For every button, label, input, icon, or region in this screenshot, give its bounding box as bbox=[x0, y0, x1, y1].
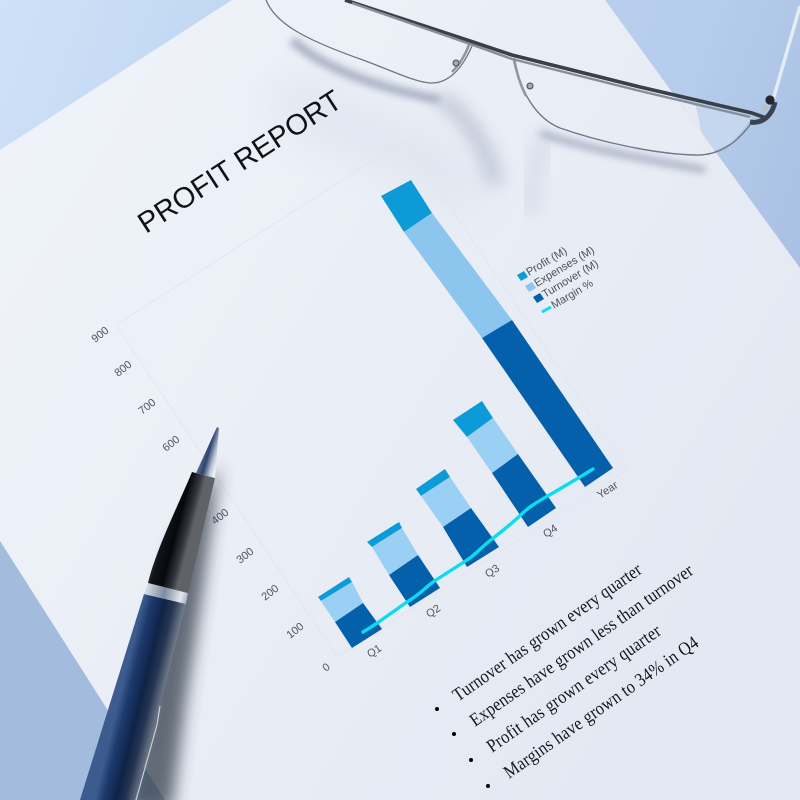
y-axis labels: 700 bbox=[136, 397, 158, 417]
legend: expenses: Expenses (M) bbox=[532, 244, 597, 290]
y-axis labels: 200 bbox=[259, 583, 281, 603]
x-axis labels: Q3 bbox=[483, 562, 502, 581]
bullet list bbox=[435, 558, 702, 788]
legend: turnover: Turnover (M) bbox=[540, 258, 601, 301]
bar: Q4 bbox=[453, 401, 556, 527]
right lens rim bbox=[513, 58, 752, 155]
y-axis labels: 900 bbox=[89, 325, 111, 345]
temple arm bbox=[773, 6, 800, 100]
y-axis labels: 100 bbox=[284, 621, 306, 641]
bar: Q2 bbox=[367, 522, 440, 607]
legend bbox=[517, 244, 601, 312]
y-axis labels: 600 bbox=[160, 434, 182, 454]
y-axis labels bbox=[89, 325, 333, 674]
pen bbox=[80, 427, 219, 800]
y-axis labels: 300 bbox=[234, 546, 256, 566]
bar: Q3 bbox=[416, 469, 499, 567]
x-axis labels: Q4 bbox=[541, 522, 560, 541]
margin line bbox=[363, 469, 593, 632]
bullet 1: Turnover has grown every quarter bbox=[448, 558, 646, 705]
pen clip bbox=[136, 706, 160, 800]
bar: Q1 bbox=[318, 577, 382, 648]
title: PROFIT REPORT bbox=[132, 84, 348, 240]
pen grip bbox=[148, 472, 215, 593]
pen body bbox=[80, 594, 186, 800]
hinge bbox=[750, 95, 775, 122]
glasses bbox=[266, 0, 800, 155]
lens over background bbox=[696, 106, 752, 152]
x-axis labels: Q1 bbox=[365, 642, 384, 661]
pen shadow bbox=[125, 465, 220, 800]
left bridge arm bbox=[452, 42, 470, 72]
bullet 2: Expenses have grown less than turnover bbox=[465, 559, 697, 730]
frame highlight bbox=[352, 3, 750, 117]
legend: margin: Margin % bbox=[549, 277, 596, 312]
bar: Year bbox=[381, 180, 613, 487]
y-axis labels: 0 bbox=[320, 661, 333, 674]
stacked bar chart bbox=[318, 180, 613, 648]
legend: profit: Profit (M) bbox=[524, 245, 569, 279]
glasses shadow on paper bbox=[280, 40, 705, 215]
x-axis labels: Q2 bbox=[424, 602, 443, 621]
refracted paper edge in lens bbox=[678, 100, 717, 154]
pen cone bbox=[196, 427, 219, 478]
bullet 3: Profit has grown every quarter bbox=[482, 620, 665, 756]
y-axis labels: 800 bbox=[112, 359, 134, 379]
x-axis labels bbox=[365, 479, 621, 661]
left bridge pad bbox=[453, 60, 459, 66]
right bridge pad bbox=[527, 83, 533, 89]
pen ring bbox=[144, 583, 188, 604]
y-axis labels: 400 bbox=[209, 507, 231, 527]
top frame bar bbox=[345, 0, 766, 118]
right bridge arm bbox=[514, 58, 526, 96]
background lower left bbox=[0, 530, 180, 800]
left lens rim bbox=[266, 0, 472, 83]
bullet 4: Margins have grown to 34% in Q4 bbox=[499, 631, 702, 782]
chart plot area outline bbox=[116, 140, 627, 657]
x-axis labels: Year bbox=[595, 479, 621, 502]
